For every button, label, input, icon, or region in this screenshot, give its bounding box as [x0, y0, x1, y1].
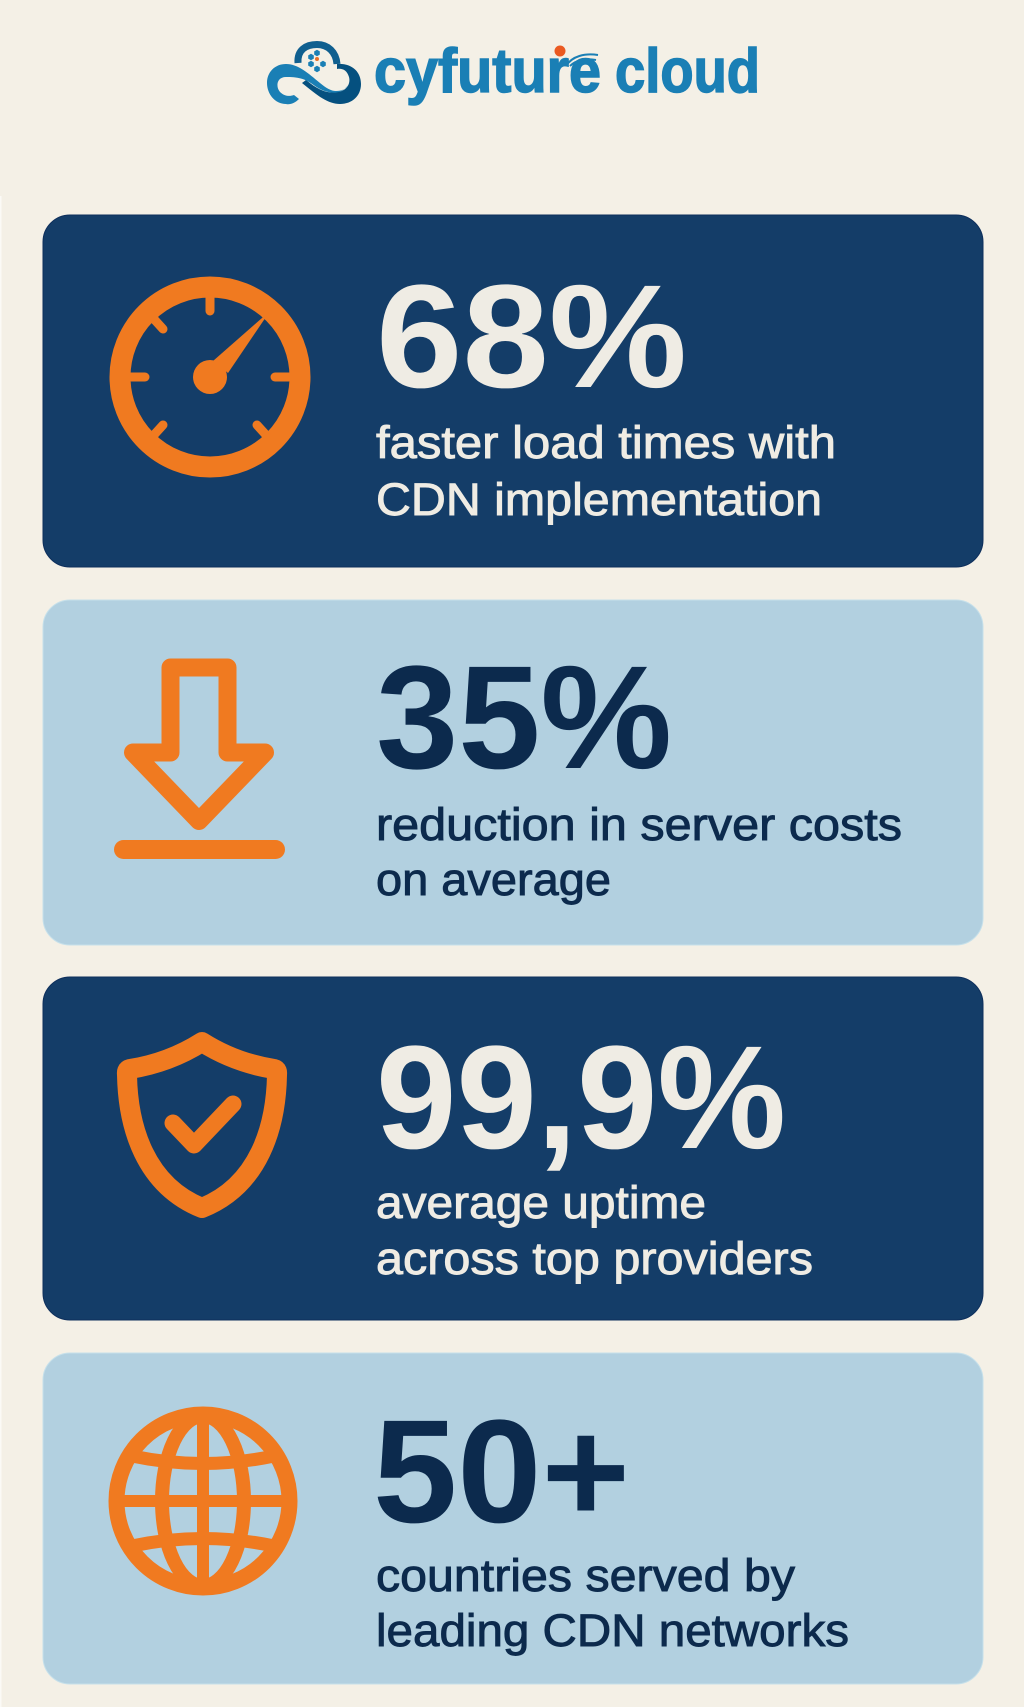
stat: 35%: 35%	[376, 636, 672, 800]
description: reduction in server costs: reduction in server costs	[376, 799, 902, 850]
icon: speedometer	[120, 287, 300, 467]
description: countries served: countries served by	[376, 1550, 796, 1601]
wordmark: cloud	[615, 37, 760, 106]
panel: 35% reduction in server costs	[43, 600, 983, 945]
stat: 50+: 50+	[373, 1390, 630, 1554]
description: average uptime: average uptime	[376, 1177, 706, 1228]
panel: 68% faster load times	[43, 215, 983, 567]
description: reduction in server costs: on average	[376, 854, 611, 905]
wordmark	[374, 37, 760, 106]
icon: download arrow	[114, 668, 285, 859]
logo: cyfuture cloud	[267, 37, 760, 106]
stat: 99,9%: 99,9%	[376, 1016, 786, 1180]
description: faster load times: faster load times with	[376, 417, 836, 468]
panel: 50+ countries served	[43, 1353, 983, 1684]
wordmark: cyfuture	[374, 37, 601, 106]
description: average uptime: across top providers	[376, 1233, 813, 1284]
icon: shield with check	[127, 1042, 277, 1208]
description: faster load times: CDN implementation	[376, 474, 822, 525]
icon: globe	[116, 1414, 290, 1588]
icon: cloud swoosh	[267, 44, 361, 104]
description: countries served: leading CDN networks	[376, 1605, 849, 1656]
panel: 99,9% uptime	[43, 977, 983, 1320]
stat: 68%: 68%	[376, 255, 687, 419]
